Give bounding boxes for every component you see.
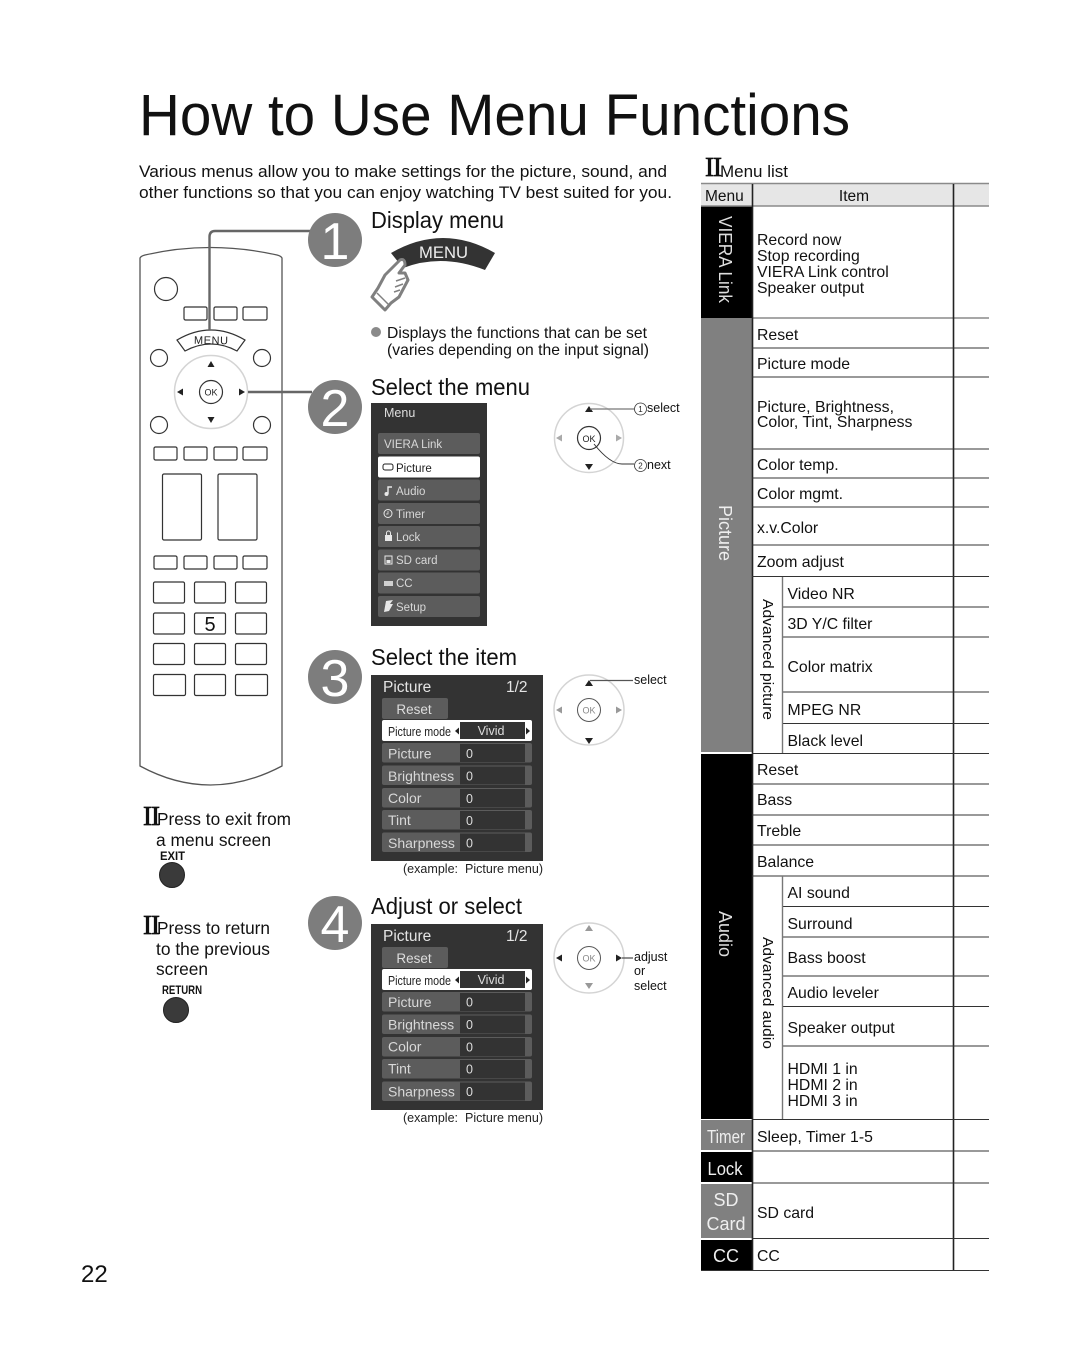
heading: menu list [705,152,788,182]
menu cell: Picture [701,318,752,752]
note: return: Press to return [157,918,270,938]
menu item: CC [378,572,480,594]
panel: picture menu screen step 4: Sharpness [388,1084,455,1100]
panel: picture menu screen step 3: 1/2 [506,679,528,696]
panel: picture menu screen step 4: Picture [383,928,431,945]
icon: menu button with pressing hand: MENU [419,243,468,262]
items: Timer: Sleep, Timer 1-5 [757,1129,873,1146]
label: advanced picture: Advanced picture [759,599,776,720]
items: VIERA Link [757,232,889,297]
heading: menu list: Menu list [720,162,788,181]
menu item: Setup: Setup [396,602,426,614]
panel: picture menu screen step 4: Color [388,1038,422,1054]
panel: picture menu screen step 3: Brightness [388,768,454,784]
items: advanced picture: Video NR [788,586,855,603]
items: Audio: Treble [757,823,801,840]
panel: picture menu screen step 3: Tint [388,812,411,828]
panel: picture menu screen step 3: Picture [383,679,431,696]
panel: picture menu screen step 3: 0 [466,770,473,784]
note: return: II [143,910,160,940]
menu cell: Timer: Timer [707,1127,745,1147]
table header [701,184,989,206]
d-pad: adjust or select [554,923,668,993]
note: exit [143,801,291,888]
items: Picture: Color, Tint, Sharpness [757,414,913,431]
side buttons [150,350,270,434]
menu cell: Audio: Audio [715,911,735,957]
menu item: Audio [378,480,480,500]
d-pad: select and next: 1 [638,405,643,414]
page number: 22 [81,1261,108,1288]
caption: example picture menu: (example: Picture menu) [403,862,543,876]
heading: select the menu: Select the menu [371,374,530,400]
items: advanced audio: HDMI 3 in [788,1093,858,1110]
menu cell: VIERA Link: VIERA Link [715,216,735,304]
color buttons [154,447,267,460]
items: advanced picture: Black level [788,733,863,750]
menu item: Picture selected: Picture [396,463,432,475]
step 1 badge: 1 [321,213,349,271]
d-pad: select and next [554,401,680,472]
d-pad [174,356,248,428]
table header: Item [839,188,869,205]
menu item: Lock: Lock [396,532,421,544]
items: advanced picture: 3D Y/C filter [788,616,872,633]
d-pad: adjust or select: OK [582,954,596,964]
note: functions that can be set: (varies depending on the input signal) [387,342,649,359]
items: CC: CC [757,1248,780,1265]
panel: picture menu screen step 4: 0 [466,1085,473,1099]
menu cell: SD Card: SD [713,1190,739,1210]
panel: picture menu screen step 3: Vivid [478,724,504,738]
panel: picture menu screen step 3 [371,675,543,861]
d-pad: adjust or select: or [634,964,645,978]
menu item: Audio: Audio [396,486,425,498]
items: Audio: Balance [757,854,814,871]
panel: picture menu screen step 4: Picture [388,994,432,1010]
items: advanced picture [788,586,873,750]
panel: picture menu screen step 4: 0 [466,996,473,1010]
note: return: to the previous [156,939,270,959]
heading: select the item: Select the item [371,644,517,670]
items: advanced audio: Speaker output [788,1020,895,1037]
panel: picture menu screen step 4: Brightness [388,1016,454,1032]
note: return: RETURN [162,983,202,997]
caption: example picture menu: (example: Picture menu) [403,1111,543,1125]
number pad: 5 [204,614,216,636]
note: return [143,910,270,1022]
note: exit: II [143,801,160,831]
power button [154,278,178,300]
d-pad: select: OK [582,706,596,716]
items: advanced audio [788,885,895,1110]
menu cell: CC [701,1240,752,1270]
menu item: SD card [378,550,480,570]
intro text: other functions so that you can enjoy watching TV best suited for you. [139,184,672,202]
d-pad: select and next: next [647,458,671,472]
panel: picture menu screen step 4: 1/2 [506,928,528,945]
panel: picture menu screen step 4: 0 [466,1040,473,1054]
panel: picture menu screen step 3: 0 [466,814,473,828]
panel: picture menu screen step 4: Tint [388,1060,411,1076]
items: advanced audio: Bass boost [788,950,866,967]
icon: menu button with pressing hand [372,238,495,310]
step 4 badge: 4 [321,896,349,954]
items: Picture: x.v.Color [757,520,818,537]
panel: picture menu screen step 4 [371,924,543,1110]
items: advanced picture: Color matrix [788,659,873,676]
menu item: VIERA Link: VIERA Link [384,439,442,451]
menu item: Timer [378,503,480,524]
items: VIERA Link: Stop recording [757,248,860,265]
items: Picture: Color mgmt. [757,486,843,503]
panel: picture menu screen step 3: Color [388,790,422,806]
items: Picture [757,327,913,571]
note: return: screen [156,959,208,979]
items: advanced picture: MPEG NR [788,702,861,719]
intro text: Various menus allow you to make settings for the picture, sound, and [139,163,667,181]
items: Audio: Bass [757,792,792,809]
panel: picture menu screen step 3: 0 [466,747,473,761]
step 1 badge [308,213,362,271]
menu item: SD card: SD card [396,555,438,567]
items: advanced audio: Audio leveler [788,985,879,1002]
number pad [154,582,268,696]
panel: picture menu screen step 3: Sharpness [388,835,455,851]
menu cell: SD Card: Card [706,1214,746,1234]
menu cell: SD Card [701,1184,752,1238]
items: Audio [757,762,814,871]
panel: main menu screen [371,403,487,626]
media buttons [154,556,267,569]
table grid [701,184,989,1270]
note: functions that can be set: Displays the functions that can be set [387,325,648,342]
heading: display menu: Display menu [371,207,504,233]
menu cell: Picture: Picture [715,505,735,561]
panel: picture menu screen step 3: Reset [396,702,432,717]
items: advanced audio: HDMI 1 in [788,1061,858,1078]
menu item: Setup [378,596,480,617]
items: advanced audio: Surround [788,916,852,933]
items: Picture: Reset [757,327,799,344]
panel: main menu screen: Menu [384,406,415,420]
d-pad: adjust or select: adjust [634,950,668,964]
menu item: Picture selected [378,456,480,478]
remote control [140,248,282,785]
panel: picture menu screen step 4: 0 [466,1018,473,1032]
step 3 badge: 3 [321,650,349,708]
note: exit: a menu screen [156,830,271,850]
items: Picture: Picture, Brightness, [757,399,894,416]
menu cell: Lock [701,1152,752,1182]
top buttons [184,307,267,320]
intro text [139,163,672,202]
panel: picture menu screen step 3: Picture mode [388,724,451,739]
menu item: Timer: Timer [396,509,425,521]
menu item: VIERA Link [378,433,480,454]
items: Picture: Picture mode [757,356,850,373]
connector: step 2 to d-pad [248,391,312,393]
label: advanced audio: Advanced audio [759,937,776,1049]
items: Picture: Color temp. [757,457,839,474]
panel: picture menu screen step 4: Vivid [478,973,504,987]
d-pad: select and next: 2 [638,462,643,470]
panel: picture menu screen step 4: Picture mode [388,973,451,988]
table header: Menu [705,188,744,205]
panel: picture menu screen step 3: 0 [466,836,473,850]
d-pad: adjust or select: select [634,979,667,993]
heading: menu list: II [705,152,722,182]
menu cell: Timer [701,1120,752,1150]
step 4 badge [308,896,362,954]
items: advanced audio: AI sound [788,885,850,902]
heading: adjust or select: Adjust or select [371,893,523,919]
items: SD Card: SD card [757,1205,814,1222]
d-pad: select: select [634,673,667,687]
menu button: MENU [194,335,228,347]
panel: picture menu screen step 4: Reset [396,951,432,966]
menu cell: Lock: Lock [708,1159,743,1179]
note: exit: EXIT [160,849,186,863]
d-pad: select and next: OK [582,434,596,444]
title: How to Use Menu Functions [139,83,850,148]
volume and channel [162,474,257,540]
step 2 badge: 2 [321,380,349,438]
d-pad: select [554,673,667,745]
menu item: CC: CC [396,578,413,590]
menu button [177,330,245,351]
d-pad: OK [204,388,218,398]
panel: picture menu screen step 3: 0 [466,792,473,806]
menu item: Lock [378,526,480,547]
items: Audio: Reset [757,762,799,779]
d-pad: select and next: select [647,401,680,415]
items: advanced audio: HDMI 2 in [788,1077,858,1094]
items: VIERA Link: Speaker output [757,280,865,297]
panel: picture menu screen step 3: Picture [388,746,432,762]
menu cell: Audio [701,754,752,1119]
menu cell: CC: CC [713,1246,739,1266]
panel: picture menu screen step 4: 0 [466,1062,473,1076]
items: Picture: Zoom adjust [757,554,845,571]
items: VIERA Link: Record now [757,232,842,249]
step 3 badge [308,650,362,708]
connector: step 1 to menu button [210,231,312,330]
menu cell: VIERA Link [701,206,752,318]
step 2 badge [308,380,362,438]
note: exit: Press to exit from [157,809,291,829]
note: functions that can be set [371,325,649,359]
table: menu list [701,184,989,1270]
items: VIERA Link: VIERA Link control [757,264,889,281]
